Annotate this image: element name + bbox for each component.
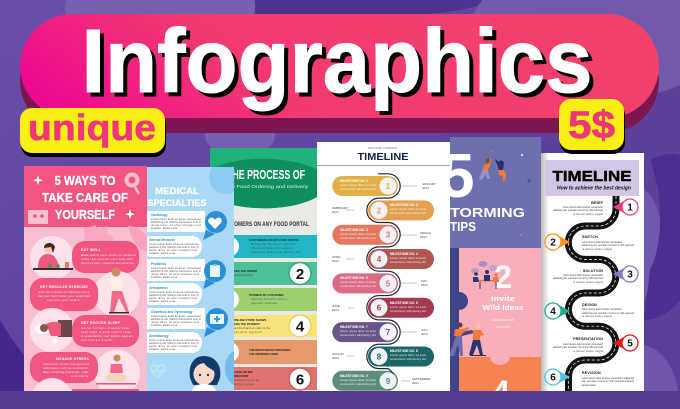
card: dermatology — [141, 332, 202, 353]
milestone text: Lorem ipsum dolor sit amet — [390, 257, 426, 260]
number circles: 1 — [386, 182, 391, 191]
header: road timeline: TIMELINE — [552, 168, 632, 185]
illustration: team at table — [471, 261, 499, 289]
stage labels: elit, sed diam nonummy nibh euismod tincidunt — [582, 380, 634, 383]
stage labels: adipiscing elit, sed diam nonummy nibh euismod — [553, 346, 604, 349]
stage labels: ut laoreet dolore magna — [573, 281, 604, 284]
row: get enough sleep: and overall health. — [81, 339, 113, 342]
text: invite wild ideas: Wild Ideas — [482, 303, 524, 312]
month labels: MAY — [421, 279, 427, 283]
month labels: APRIL — [332, 255, 341, 259]
step 4: ONLINE STORE SHOWS — [234, 318, 266, 322]
step 6: DISCOUNT — [234, 374, 249, 378]
heading: medical: SPECIALTIES — [148, 198, 206, 208]
month labels — [332, 182, 436, 385]
pins: 2 — [550, 238, 556, 248]
step 4: ERS THE PAYMENT — [234, 322, 260, 326]
step 6: CODE OR BIG — [234, 370, 253, 374]
step 1: CUSTOMERS ON ANY FOOD PORTAL — [249, 238, 300, 242]
panel: medical specialties — [147, 167, 234, 391]
row: manage stress: deep breathing exercises, yoga, — [43, 371, 89, 374]
step 3: PAYMENT BY CUSTOMER — [249, 293, 284, 297]
text: all ideas are possible: All ideas are — [492, 317, 515, 322]
row: get regular exercise: Just 30 minutes of walking every — [39, 291, 90, 294]
illustration: two people high five — [479, 150, 531, 236]
snake connector — [367, 174, 400, 390]
milestone text: MILESTONE NO. 5 — [340, 276, 368, 280]
label: include company: INCLUDE COMPANY — [368, 146, 398, 150]
stage labels: ut laoreet dolore magna — [582, 248, 613, 251]
stage labels: PRESENTATION — [573, 337, 603, 341]
stage labels: Lorem ipsum dolor sit amet, consectetur — [563, 343, 603, 346]
card: cardiology — [147, 211, 205, 232]
number circles: 4 — [377, 255, 382, 264]
number circles: 3 — [386, 231, 391, 240]
badge: unique — [20, 107, 166, 157]
stage labels: adipiscing elit, sed diam nonummy nibh euismod — [582, 312, 635, 315]
month labels: SEPTEMBER — [412, 377, 431, 381]
stage labels: Lorem ipsum dolor sit amet, consectetur — [582, 308, 622, 311]
number circles: 6 — [377, 304, 382, 313]
stage labels: adipiscing elit, sed diam nonummy nibh euismod — [553, 277, 604, 280]
milestone text: Lorem ipsum dolor sit amet — [340, 281, 376, 284]
stage labels: laoreet dolore — [582, 384, 597, 387]
text: all ideas are possible — [492, 317, 515, 329]
milestone text: MILESTONE NO. 1 — [340, 179, 368, 183]
row: manage stress: techniques such as meditation, — [43, 367, 89, 370]
icon: heart bubble — [203, 211, 227, 240]
milestone text: consectetur adipiscing elit — [390, 358, 426, 361]
month labels: MARCH — [420, 231, 431, 235]
row: manage stress: Implement stress management — [43, 363, 89, 366]
badge: price: 5$ — [568, 104, 615, 147]
card: pediatrics — [147, 259, 205, 281]
card: pediatrics: adipiscing elit. Mauris elementum sem in — [151, 270, 202, 273]
month labels: 2024 — [412, 381, 419, 385]
card: internal medicine: ipsum lacus, sit amet volutpat risus — [149, 249, 198, 252]
step 6: 6 — [296, 372, 304, 388]
card: pediatrics: ipsum lacus, sit amet volutpat risus — [151, 273, 200, 276]
milestone text: Lorem ipsum dolor sit amet — [340, 184, 376, 187]
icon: clipboard bubble — [203, 260, 226, 289]
milestone text: MILESTONE NO. 9 — [340, 374, 368, 378]
row: eat well: EAT WELL — [81, 248, 102, 252]
heading: brainstorming tips — [389, 206, 525, 234]
heading: 5 ways: YOURSELF — [55, 207, 115, 222]
section: pink step 2 — [449, 248, 541, 409]
month labels: 2024 — [421, 283, 428, 287]
month labels: JANUARY — [422, 182, 436, 186]
month labels: JUNE — [332, 304, 340, 308]
milestone pills — [332, 176, 434, 391]
milestone text: Lorem ipsum dolor sit amet — [340, 233, 376, 236]
card: dermatology: sodales. Etiam urna — [149, 348, 176, 351]
heading: 5 ways: 5 WAYS TO — [54, 173, 116, 188]
row: get enough sleep: each night. A good night's sleep — [81, 331, 132, 334]
badge: unique: unique — [28, 107, 156, 148]
milestone text: Lorem ipsum dolor sit amet — [340, 379, 376, 382]
big number 4: 4 — [492, 374, 510, 409]
pins: 1 — [627, 202, 633, 214]
card: internal medicine: Lorem ipsum dolor sit amet, consectetur — [149, 243, 199, 246]
step 4: ect the finalized order to the — [234, 327, 271, 330]
icon: sparkle and magnifier — [28, 172, 147, 252]
row: get regular exercise: GET REGULAR EXERCISE — [40, 285, 89, 289]
step 5: THE ORDERED FOOD — [249, 352, 278, 356]
badge: price — [559, 99, 625, 154]
card: internal medicine: Internal Medicine — [149, 238, 175, 242]
milestone text: Lorem ipsum dolor sit amet — [390, 306, 426, 309]
big number 2: 2 — [494, 259, 512, 295]
step 6: delivery service — [234, 383, 255, 386]
milestone text: MILESTONE NO. 3 — [340, 228, 368, 232]
stage labels: ut laoreet dolore magna — [573, 213, 604, 216]
card: dermatology: adipiscing elit. Mauris elementum sem in — [149, 342, 200, 345]
subtitle: process: Online Food Ordering and Delivery — [218, 184, 309, 189]
stage labels: SOLUTION — [583, 269, 603, 273]
milestone text: Lorem ipsum dolor sit amet — [390, 208, 426, 211]
number circles — [370, 178, 396, 389]
pins: 5 — [627, 338, 633, 350]
row: get regular exercise — [30, 268, 140, 317]
month labels: 2024 — [332, 259, 339, 263]
step 1: Choosing food with quantity — [251, 247, 294, 250]
heading: 5 ways — [42, 173, 128, 222]
stage labels: SKETCH — [582, 235, 598, 239]
heading: process: THE PROCESS OF — [227, 168, 305, 182]
step 5: THE RESTAURANT PREPARES — [249, 348, 291, 352]
row: manage stress: MANAGE STRESS — [56, 357, 89, 361]
text: invite wild ideas: Invite — [491, 294, 515, 303]
icon: first aid bubble — [204, 308, 228, 337]
stage labels: BRIEF — [591, 201, 604, 205]
card: obstetrics and gynecology — [147, 308, 205, 329]
text: invite wild ideas — [482, 294, 524, 312]
step 6 — [210, 367, 317, 390]
row: get enough sleep: Aim for 7-9 hours of quality sleep — [81, 327, 130, 330]
card: dermatology: ipsum lacus, sit amet volutpat risus — [149, 345, 198, 348]
stage labels: REVISION — [582, 371, 601, 375]
road — [568, 196, 616, 391]
card: pediatrics: sodales. Etiam urna — [151, 276, 178, 279]
card: cardiology: sodales. Etiam urna — [151, 227, 178, 230]
milestone text: consectetur adipiscing elit — [340, 237, 376, 240]
row: eat well: the necessary vitamins and minerals. — [81, 262, 135, 265]
card: orthopedics: ipsum lacus, sit amet volutpat risus — [149, 297, 198, 300]
row: get enough sleep — [30, 308, 139, 352]
stage labels — [553, 201, 635, 387]
number circles: 5 — [386, 279, 391, 288]
row: get regular exercise: improve your health. — [48, 299, 81, 302]
card: orthopedics — [141, 283, 202, 305]
row: eat well — [30, 236, 139, 280]
number circles: 7 — [386, 328, 391, 337]
card: cardiology: Cardiology — [151, 213, 168, 217]
card: orthopedics: sodales. Etiam urna — [149, 300, 176, 303]
month labels: 2024 — [421, 332, 428, 336]
step 2: placed the order — [234, 274, 253, 277]
row: get enough sleep: is essential for your body's recovery — [81, 335, 134, 338]
pins: 3 — [627, 270, 633, 280]
step 4: 4 — [296, 318, 305, 336]
step 2 — [210, 262, 317, 285]
month labels: 2024 — [332, 308, 339, 312]
card: obstetrics and gynecology: Obstetrics and Gynecology — [151, 310, 193, 314]
milestone text: MILESTONE NO. 7 — [340, 325, 368, 329]
heading: brainstorming tips: TIPS — [450, 220, 476, 234]
milestone text: MILESTONE NO. 6 — [390, 301, 418, 305]
row: get regular exercise: day can help boost your mood and — [38, 295, 91, 298]
pins: 4 — [550, 306, 556, 318]
month labels: 2024 — [332, 210, 339, 214]
stage labels: ut laoreet dolore magna — [582, 315, 613, 318]
milestone text: MILESTONE NO. 8 — [390, 349, 418, 353]
stage labels: Lorem ipsum dolor sit amet, consectetur — [563, 206, 603, 209]
stage labels: Lorem ipsum dolor sit amet, consectetur adipiscing — [582, 377, 635, 380]
card: cardiology: adipiscing elit. Mauris elementum sem in — [151, 221, 202, 224]
stage labels: DESIGN — [582, 303, 597, 307]
row: eat well: Make sure to eat a variety of nutritious — [81, 254, 137, 257]
milestone text: MILESTONE NO. 4 — [390, 252, 418, 256]
stage labels: Lorem ipsum dolor sit amet, consectetur — [582, 241, 622, 244]
month labels: 2024 — [422, 186, 429, 190]
panel: the process of — [210, 148, 317, 391]
step 3: payment methods — [251, 302, 278, 305]
milestone text: consectetur adipiscing elit — [340, 188, 376, 191]
card: cardiology: ipsum lacus, sit amet volutpat risus — [151, 224, 202, 227]
big number 5: 5 — [440, 142, 474, 211]
icon: heartbeat logo — [150, 365, 166, 377]
card: internal medicine: sodales. Etiam urna — [149, 252, 176, 255]
card: internal medicine: adipiscing elit. Mauris elementum sem in — [149, 246, 200, 249]
card: obstetrics and gynecology: ipsum lacus, sit amet volutpat risus — [151, 321, 200, 324]
heading: medical — [148, 187, 206, 206]
card: obstetrics and gynecology: adipiscing elit. Mauris elementum sem in — [151, 318, 202, 321]
milestone text: Lorem ipsum dolor sit amet — [390, 354, 426, 357]
step 1: Adding the order to the delivery cart — [251, 251, 301, 254]
milestone text: consectetur adipiscing elit — [390, 310, 426, 313]
heading: timeline: TIMELINE — [358, 152, 409, 163]
card: orthopedics: Orthopedics — [149, 286, 168, 290]
card: orthopedics: Lorem ipsum dolor sit amet, consectetur — [149, 291, 199, 294]
row: manage stress — [24, 350, 147, 409]
step 1: Browsing the menu options — [251, 243, 296, 246]
milestone text: MILESTONE NO. 2 — [390, 203, 418, 207]
card: dermatology: Dermatology — [149, 334, 169, 338]
header: road timeline: How to achieve the best design — [557, 186, 631, 192]
step 5 — [210, 340, 317, 364]
banner — [20, 14, 659, 133]
card: obstetrics and gynecology: sodales. Etiam urna — [151, 324, 178, 327]
step 1 — [210, 235, 317, 258]
month labels: FEBRUARY — [332, 206, 348, 210]
number circles: 9 — [386, 377, 391, 386]
illustration: two people carrying puzzle — [449, 322, 486, 356]
row: eat well: foods that provide your body with — [81, 258, 134, 261]
heading: brainstorming tips: BRAINSTORMING — [389, 206, 525, 220]
milestone text: consectetur adipiscing elit — [390, 261, 426, 264]
panel: brainstorming tips — [389, 137, 541, 409]
milestone text — [340, 179, 426, 386]
subheading: customers: CUSTOMERS ON ANY FOOD PORTAL — [221, 222, 309, 228]
step 2: 2 — [296, 266, 304, 283]
step 3: Various flexible online — [251, 298, 288, 301]
icon: doctor — [190, 356, 220, 391]
milestone text: consectetur adipiscing elit — [340, 285, 376, 288]
milestone text: consectetur adipiscing elit — [340, 383, 376, 386]
title: Infographics — [86, 16, 596, 116]
card: cardiology: Lorem ipsum dolor sit amet, consectetur — [151, 218, 201, 221]
stage labels: Lorem ipsum dolor sit amet, consectetur — [563, 274, 603, 277]
step 6: customers on the go — [234, 379, 260, 382]
panel: timeline milestones — [317, 142, 450, 391]
row: get enough sleep: GET ENOUGH SLEEP — [81, 321, 121, 325]
month labels: 2024 — [332, 356, 339, 360]
pins — [545, 199, 638, 385]
stage labels: adipiscing elit, sed diam nonummy nibh euismod — [582, 244, 635, 247]
step 3 — [210, 288, 317, 311]
number circles: 8 — [377, 352, 382, 361]
heading: 5 ways: TAKE CARE OF — [42, 190, 128, 205]
step 4: ant after payment — [234, 331, 262, 334]
title: Infographics — [82, 12, 592, 112]
card: dermatology: Lorem ipsum dolor sit amet, consectetur — [149, 339, 199, 342]
panel: road timeline — [541, 153, 644, 391]
stage labels: adipiscing elit, sed diam nonummy nibh euismod — [553, 209, 604, 212]
pins: 6 — [550, 372, 556, 384]
card: orthopedics: adipiscing elit. Mauris elementum sem in — [149, 294, 200, 297]
milestone text: consectetur adipiscing elit — [390, 212, 426, 215]
stage labels: ut laoreet dolore magna — [573, 350, 604, 353]
row: manage stress: or journaling. — [71, 375, 89, 378]
panel: 5 ways to take care of yourself — [24, 166, 147, 409]
card: pediatrics: Pediatrics — [151, 262, 166, 266]
step 2: SEE THE ORDER — [234, 269, 257, 273]
heading: medical: MEDICAL — [155, 186, 200, 196]
month labels: AUGUST — [332, 352, 345, 356]
card: obstetrics and gynecology: Lorem ipsum dolor sit amet, consectetur — [151, 315, 201, 318]
card: pediatrics: Lorem ipsum dolor sit amet, consectetur — [151, 267, 201, 270]
milestone text: consectetur adipiscing elit — [340, 334, 376, 337]
step 4 — [210, 315, 317, 337]
month labels: 2024 — [420, 235, 427, 239]
card: internal medicine — [141, 236, 202, 257]
month labels: JULY — [421, 328, 428, 332]
milestone text: Lorem ipsum dolor sit amet — [340, 330, 376, 333]
number circles: 2 — [377, 206, 382, 215]
header: road timeline — [545, 160, 639, 196]
text: all ideas are possible: possible — [496, 324, 511, 329]
